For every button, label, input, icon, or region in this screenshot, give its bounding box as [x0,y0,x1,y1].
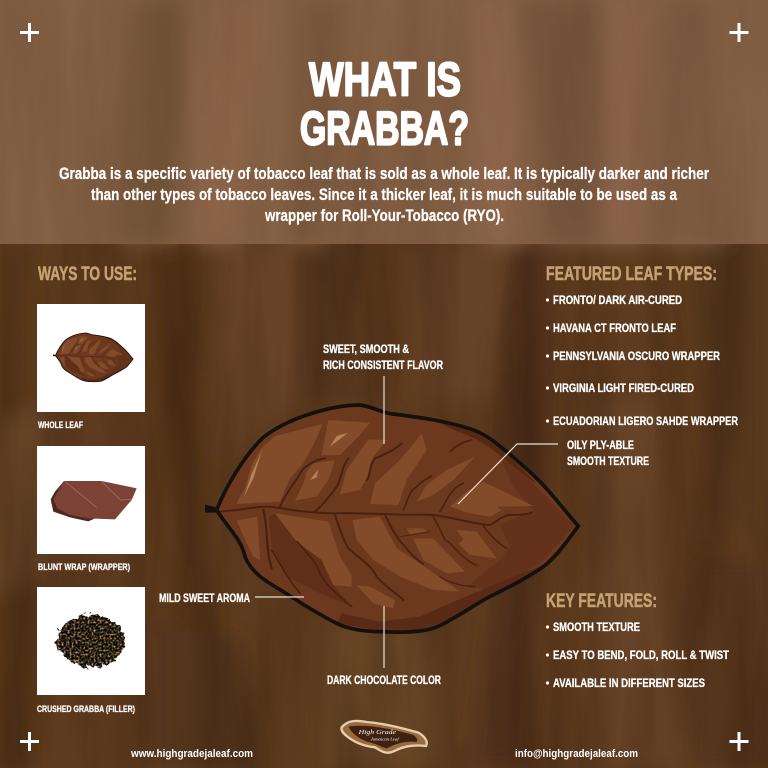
title: GRABBA? [300,102,469,156]
panel: featured leaf types: HAVANA CT FRONTO LEAF [553,321,676,335]
logo [341,721,427,753]
callout: flavor [323,342,443,444]
title [300,54,469,156]
logo: High Grade [357,729,396,736]
logo: Jamaican Leaf [371,737,400,742]
callout: texture: SMOOTH TEXTURE [567,454,649,468]
intro paragraph [59,164,709,225]
footer email: info@highgradejaleaf.com [515,748,638,760]
panel: featured leaf types: VIRGINIA LIGHT FIRED-CURED [553,381,694,395]
icon: blunt wrap sheet [51,481,137,521]
card: blunt wrap: BLUNT WRAP (WRAPPER) [38,562,130,572]
card: crushed grabba [37,587,145,714]
panel: key features: AVAILABLE IN DIFFERENT SIZES [553,676,705,690]
card: crushed grabba: CRUSHED GRABBA (FILLER) [37,704,135,714]
panel: featured leaf types: PENNSYLVANIA OSCURO WRAPPER [553,349,720,363]
panel: key features [546,591,730,690]
panel: key features: SMOOTH TEXTURE [553,620,640,634]
callout: aroma: MILD SWEET AROMA [159,591,250,605]
callout: texture: OILY PLY-ABLE [567,438,634,452]
callout: color [327,606,441,687]
callout: color: DARK CHOCOLATE COLOR [327,673,441,687]
card: whole leaf: WHOLE LEAF [38,420,83,430]
heading: ways to use: WAYS TO USE: [38,264,137,285]
callout: flavor: RICH CONSISTENT FLAVOR [323,358,443,372]
panel: featured leaf types: FRONTO/ DARK AIR-CURED [553,293,682,307]
callout: flavor: SWEET, SMOOTH & [323,342,409,356]
callout: texture [458,438,649,504]
footer website: www.highgradejaleaf.com [130,748,253,760]
icon: crushed tobacco pile [57,615,125,667]
card: blunt wrap [37,446,145,572]
panel: key features: KEY FEATURES: [546,591,657,612]
header band [0,0,768,244]
intro paragraph: wrapper for Roll-Your-Tobacco (RYO). [264,206,504,225]
card: whole leaf [37,304,145,430]
large tobacco leaf illustration [205,405,578,632]
title: WHAT IS [309,54,461,106]
panel: featured leaf types [546,264,738,428]
panel: key features: EASY TO BEND, FOLD, ROLL & TWIST [553,648,730,662]
icon: whole leaf [53,333,133,382]
